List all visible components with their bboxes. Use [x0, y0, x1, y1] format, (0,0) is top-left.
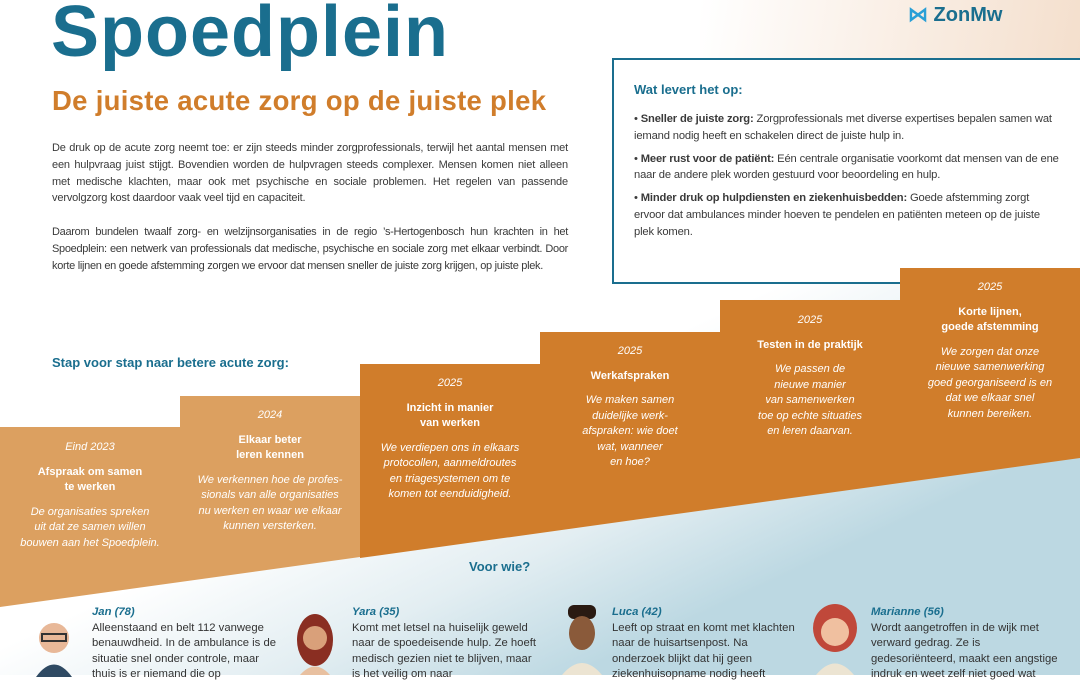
text: Marianne (56)	[871, 606, 944, 618]
step 5: toe op echte situaties	[758, 410, 862, 422]
step 3	[381, 377, 519, 500]
step 5: Testen in de praktijk	[757, 338, 863, 350]
panel: benefits	[612, 58, 1080, 284]
step 2	[198, 409, 342, 532]
step 4: Werkafspraken	[591, 370, 669, 382]
subtitle: De juiste acute zorg op de juiste plek	[52, 85, 546, 116]
intro text: Daarom bundelen twaalf zorg- en welzijnsorganisaties in de regio ’s-Hertogenbosch hun krachten in het Spoedplein: een netwerk van professionals dat medische, psychische en sociale zorg met elkaar verbindt. Door korte lijnen en goede afstemming zorgen we ervoor dat mensen sneller de juiste zorg krijgen, op juiste plek.	[52, 226, 568, 272]
step 4: We maken samen	[586, 394, 674, 406]
text: Jan (78)	[92, 606, 135, 618]
step 6: kunnen bereiken.	[948, 408, 1032, 420]
step 3: komen tot eenduidigheid.	[389, 488, 511, 500]
persona: Luca	[562, 605, 602, 675]
step 6	[928, 281, 1052, 420]
step 2: kunnen versterken.	[223, 520, 317, 532]
text: Leeft op straat en komt met klachten naar de huisartsenpost. Na onderzoek blijkt dat hij geen ziekenhuisopname nodig heeft	[612, 622, 795, 680]
benefits list: • Sneller de juiste zorg: Zorgprofessionals met diverse expertises bepalen samen wat iemand nodig heeft en schakelen direct de juiste hulp in. • Meer rust voor de patiënt: Eén centrale organisatie voorkomt dat mensen van de ene naar de andere plek worden gestuurd voor beoordeling en hulp. • Minder druk op hulpdiensten en ziekenhuisbedden: Goede afstemming zorgt ervoor dat ambulances minder hoeven te pendelen en patiënten meteen op de juiste plek komen.	[634, 113, 1059, 238]
icon: Yara face	[297, 614, 333, 675]
step 3: protocollen, aanmeldroutes	[384, 457, 516, 469]
step 6: Korte lijnen,	[958, 306, 1022, 318]
intro text	[52, 142, 568, 272]
step 6: We zorgen dat onze	[941, 346, 1039, 358]
step 1: De organisaties spreken	[31, 506, 149, 518]
step 4: wat, wanneer	[597, 440, 663, 452]
icon: Jan face	[36, 623, 72, 677]
step 2: 2024	[258, 409, 282, 421]
step 6: goede afstemming	[941, 321, 1039, 333]
persona: Marianne	[813, 604, 857, 675]
step 6: 2025	[978, 281, 1002, 293]
heading: steps: Stap voor stap naar betere acute zorg:	[52, 355, 289, 370]
step 5: nieuwe manier	[774, 378, 846, 390]
text: Yara (35)	[352, 606, 399, 618]
step 2: leren kennen	[236, 449, 304, 461]
icon: Luca face	[562, 605, 602, 675]
step 5: van samenwerken	[765, 394, 855, 406]
step 6: dat we elkaar snel	[946, 392, 1034, 404]
step 1: uit dat ze samen willen	[34, 521, 146, 533]
persona: Jan	[36, 623, 72, 677]
text: Wordt aangetroffen in de wijk met verward gedrag. Ze is gedesoriënteerd, maakt een angstige indruk en weet zelf niet goed wat	[871, 622, 1058, 680]
step 4: 2025	[618, 345, 642, 357]
step 4: en hoe?	[610, 456, 650, 468]
icon: Marianne face	[813, 604, 857, 675]
step 4: duidelijke werk-	[592, 410, 668, 422]
logo: ⋈ ZonMw	[908, 4, 1002, 26]
step 4	[582, 345, 678, 468]
step 3: Inzicht in manier	[407, 402, 493, 414]
step 6: nieuwe samenwerking	[936, 361, 1044, 373]
text: Luca (42)	[612, 606, 662, 618]
step 1: bouwen aan het Spoedplein.	[20, 536, 160, 548]
heading: voor wie: Voor wie?	[469, 559, 530, 574]
step 2: Elkaar beter	[238, 434, 301, 446]
step 5: en leren daarvan.	[767, 425, 853, 437]
benefits heading: Wat levert het op:	[634, 82, 743, 97]
text: Alleenstaand en belt 112 vanwege benauwdheid. In de ambulance is de situatie snel onder controle, maar thuis is er niemand die op	[92, 622, 276, 680]
step 1: te werken	[65, 481, 115, 493]
step 3: 2025	[438, 377, 462, 389]
step 1: Eind 2023	[65, 441, 115, 453]
step 4: afspraken: wie doet	[582, 425, 678, 437]
step 5: We passen de	[775, 363, 845, 375]
step 3: en triagesystemen om te	[390, 472, 510, 484]
step 1: Afspraak om samen	[38, 466, 142, 478]
persona: Yara	[297, 614, 333, 675]
step 3: van werken	[420, 417, 480, 429]
text: Komt met letsel na huiselijk geweld naar de spoedeisende hulp. Ze hoeft medisch gezien niet te blijven, maar is het veilig om naar	[352, 622, 536, 680]
intro text: De druk op de acute zorg neemt toe: er zijn steeds minder zorgprofessionals, terwijl het aantal mensen met een hulpvraag juist stijgt. Bovendien worden de hulpvragen steeds complexer. Mensen komen niet alleen met medische klachten, maar ook met psychische en sociale problemen. Het regelen van passende vervolgzorg kost daardoor vaak veel tijd en capaciteit.	[52, 142, 568, 204]
step 2: sionals van alle organisaties	[201, 489, 339, 501]
step 5	[757, 314, 863, 437]
step 1	[20, 441, 160, 548]
step 2: nu werken en waar we elkaar	[198, 504, 342, 516]
step 3: We verdiepen ons in elkaars	[381, 442, 519, 454]
step 2: We verkennen hoe de profes-	[198, 474, 342, 486]
step 5: 2025	[798, 314, 822, 326]
step 6: goed georganiseerd is en	[928, 376, 1052, 388]
